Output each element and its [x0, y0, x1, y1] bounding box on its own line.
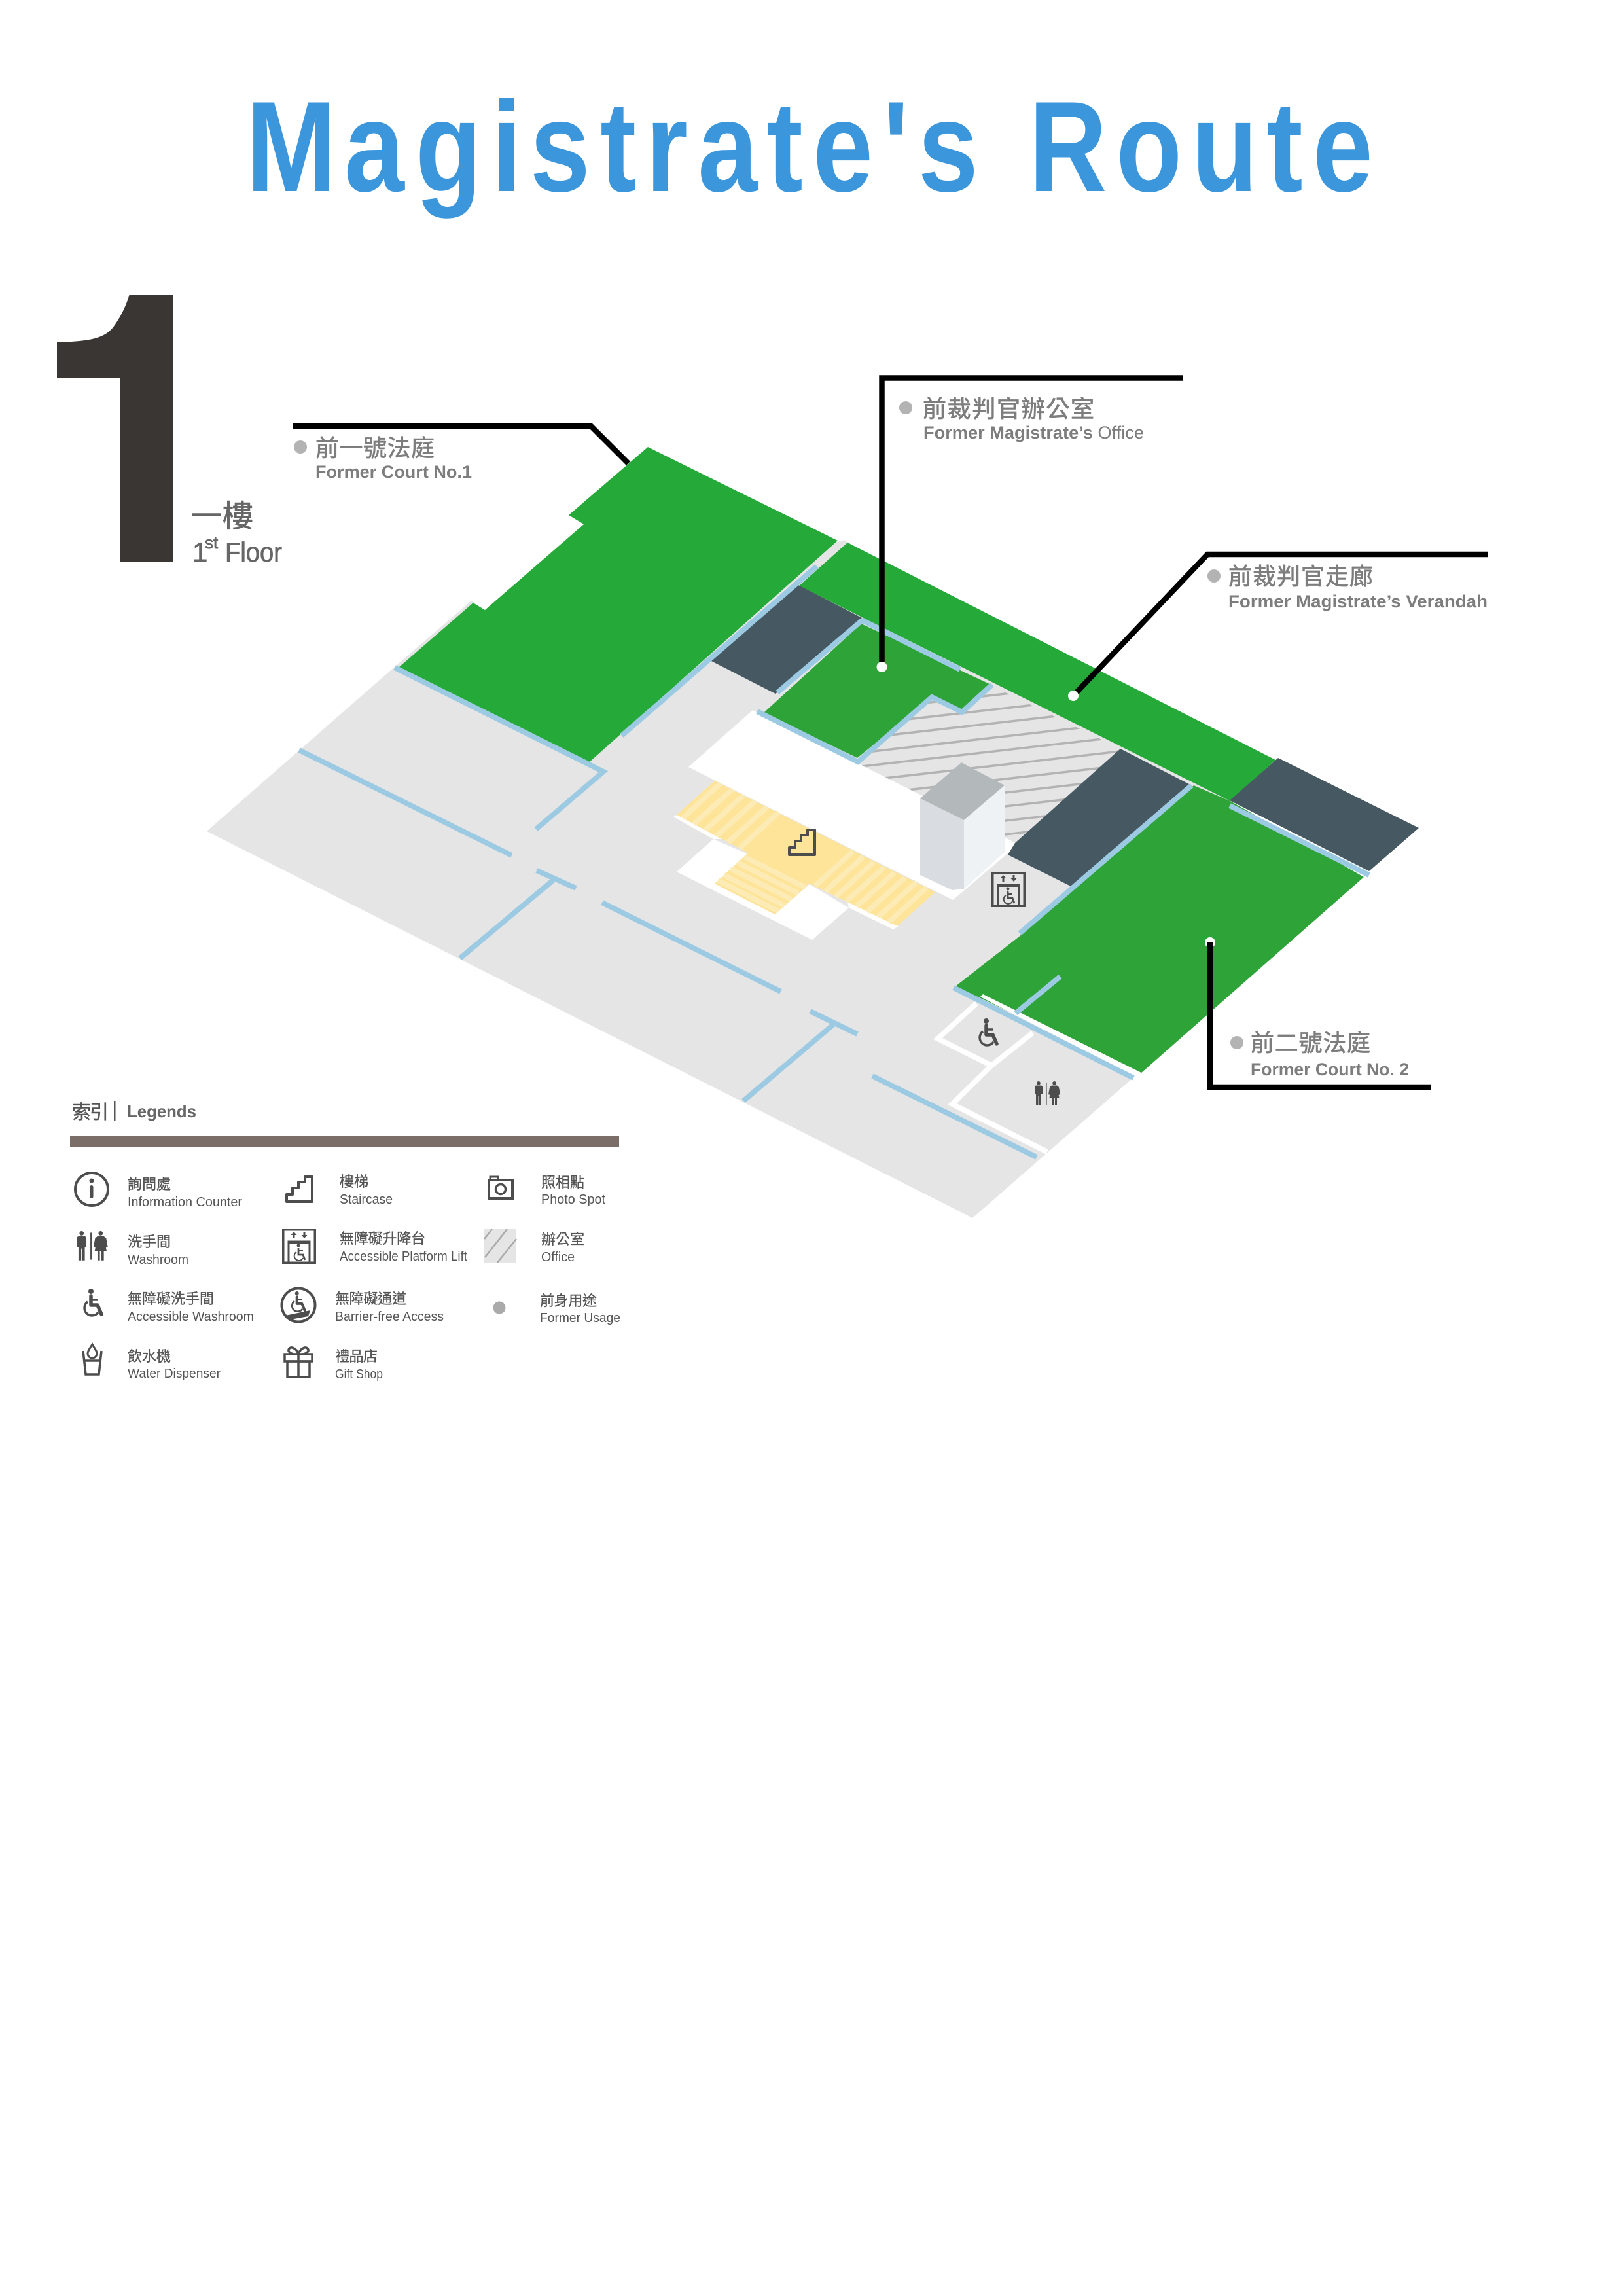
- legend: accessible washroom: [84, 1289, 254, 1324]
- legend: information counter: Information Counter: [128, 1195, 242, 1210]
- legend: staircase: Staircase: [340, 1193, 393, 1207]
- legend bar: [70, 1136, 619, 1147]
- callout: former magistrate's office: 前裁判官辦公室: [923, 395, 1094, 422]
- platform lift block: [920, 762, 1005, 890]
- isometric floor map: [207, 447, 1419, 1218]
- white washroom outlines: [938, 1003, 1047, 1152]
- office hatching: [861, 692, 1118, 836]
- blue walls: [299, 566, 1369, 1157]
- legend: photo spot: 照相點: [541, 1174, 584, 1191]
- floor label: 1: [192, 537, 207, 567]
- former court no.1 (green): [399, 447, 838, 762]
- legend heading: 索引: [72, 1102, 109, 1123]
- legend: office: [484, 1229, 584, 1265]
- legend heading: Legends: [127, 1102, 196, 1121]
- floor label: [191, 499, 282, 567]
- icon: platform lift on map: [993, 873, 1024, 906]
- callout: former magistrate's verandah: [1068, 554, 1488, 701]
- legend: barrier-free access: 無障礙通道: [335, 1291, 406, 1307]
- legend: photo spot: [489, 1174, 605, 1207]
- strip beside court 1 notch: [395, 601, 475, 668]
- floor label: Floor: [225, 537, 282, 567]
- callout: former court no.2: Former Court No. 2: [1251, 1060, 1409, 1079]
- legend: water dispenser: [83, 1344, 221, 1381]
- grey floor: [207, 540, 1243, 1218]
- floor label: st: [205, 533, 219, 552]
- legend: former usage: Former Usage: [540, 1311, 620, 1325]
- callout: former court no.2: 前二號法庭: [1251, 1030, 1370, 1056]
- legend: accessible washroom: 無障礙洗手間: [128, 1291, 214, 1307]
- legend: information counter: [75, 1173, 242, 1210]
- icon: accessible washroom on map: [980, 1018, 997, 1045]
- white stair opening: [673, 710, 1018, 940]
- dark slate blocks: [711, 585, 1419, 886]
- callout: former magistrate's verandah: Former Magistrate’s Verandah: [1228, 592, 1488, 611]
- legend: photo spot: Photo Spot: [541, 1193, 605, 1207]
- former magistrate's verandah (green): [799, 543, 1275, 801]
- legend: accessible washroom: Accessible Washroom: [128, 1310, 254, 1324]
- legend: office: Office: [541, 1250, 575, 1265]
- legend: staircase: 樓梯: [340, 1174, 368, 1190]
- legend: former usage: [493, 1293, 620, 1325]
- callout: former magistrate's office: Former Magistrate’s Office: [923, 423, 1144, 442]
- former magistrate's office (green): [764, 624, 990, 758]
- legend: gift shop text: Gift Shop: [335, 1367, 383, 1382]
- white strip under court 2: [980, 994, 1143, 1078]
- legend: water dispenser: 飲水機: [128, 1348, 171, 1365]
- legend: washroom: Washroom: [128, 1253, 188, 1267]
- callout: former court no.1: 前一號法庭: [315, 435, 435, 461]
- legend: gift shop text: [335, 1348, 383, 1382]
- yellow staircase: [677, 781, 935, 926]
- legend: washroom: 洗手間: [128, 1234, 171, 1250]
- legend: barrier-free access: Barrier-free Access: [335, 1310, 444, 1324]
- legend: water dispenser: Water Dispenser: [128, 1367, 221, 1381]
- former court no.2 (green): [955, 785, 1364, 1073]
- callout: former magistrate's office: [877, 378, 1183, 672]
- legend: barrier-free access: [281, 1288, 444, 1324]
- icon: washroom on map: [1035, 1081, 1060, 1105]
- legend: gift shop: [285, 1348, 312, 1377]
- legend: office: 辦公室: [541, 1231, 584, 1247]
- callout: former court no.2: [1205, 937, 1431, 1087]
- icon: staircase on map: [789, 830, 815, 855]
- callout: former magistrate's verandah: 前裁判官走廊: [1228, 563, 1373, 590]
- legend: washroom: [77, 1231, 188, 1267]
- floor label: 一樓: [191, 499, 253, 533]
- legend: gift shop text: 禮品店: [335, 1348, 378, 1365]
- legend: accessible platform lift: Accessible Platform Lift: [340, 1249, 467, 1264]
- callout: former court no.1: [293, 426, 628, 482]
- legend: accessible platform lift: 無障礙升降台: [340, 1230, 425, 1247]
- legend panel: [70, 1101, 620, 1382]
- legend heading: [72, 1101, 196, 1123]
- floor number: 1: [57, 295, 173, 562]
- callout: former court no.1: Former Court No.1: [315, 462, 472, 482]
- legend: accessible platform lift: [283, 1230, 467, 1264]
- legend: former usage: 前身用途: [540, 1293, 597, 1309]
- legend: staircase: [287, 1174, 393, 1207]
- title: Magistrate's Route: [246, 75, 1373, 219]
- legend: information counter: 詢問處: [128, 1176, 171, 1193]
